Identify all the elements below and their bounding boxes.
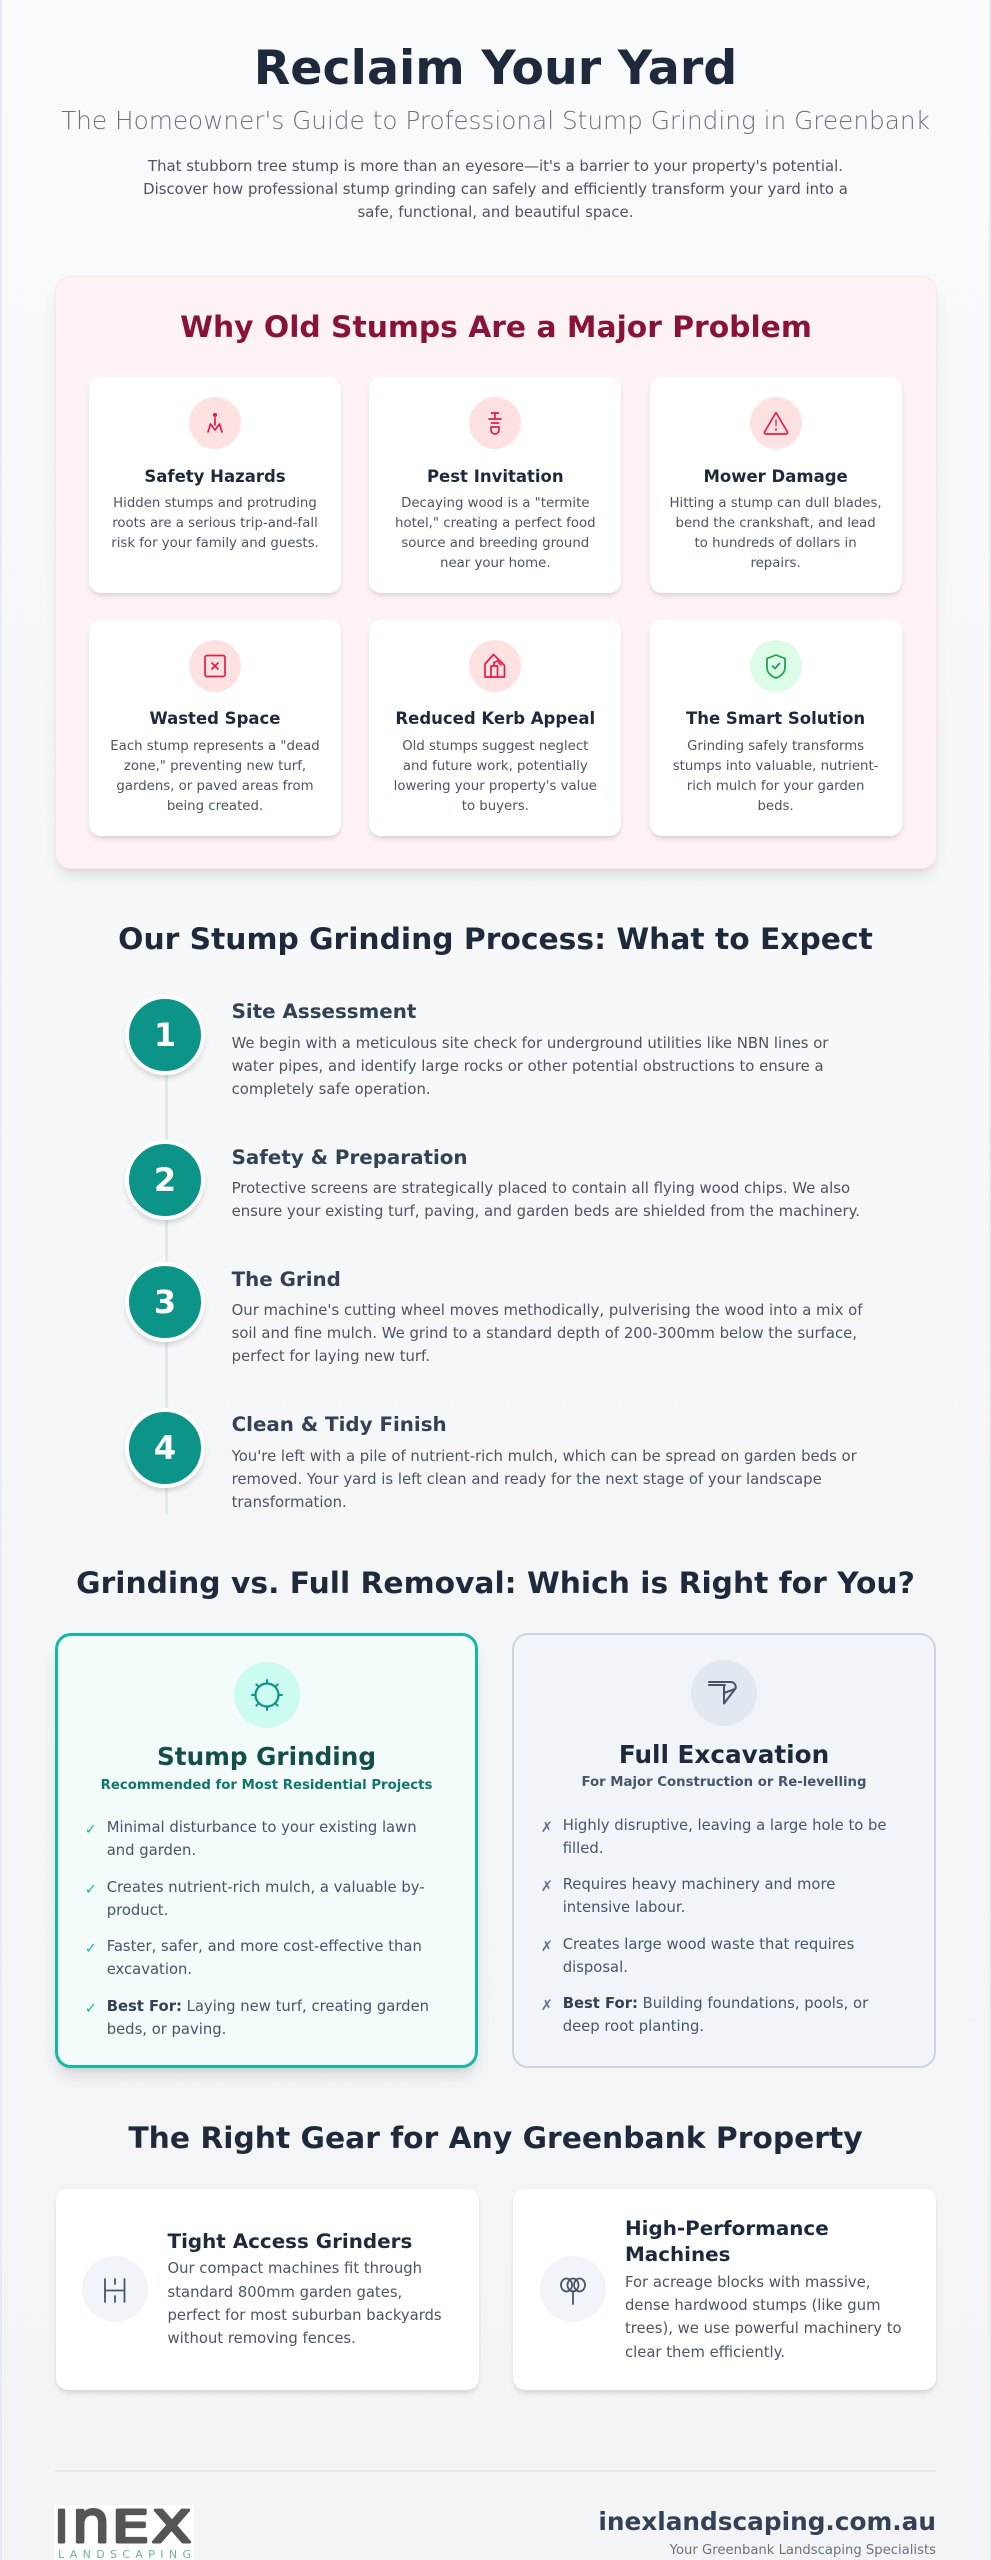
step title: The Grind [232, 1268, 341, 1290]
step text: soil and fine mulch. We grind to a standard depth of 200-300mm below the surface, [232, 1324, 857, 1342]
card: reduced kerb appeal [369, 620, 621, 836]
icon: grinding wheel [234, 1662, 300, 1728]
card title [625, 2216, 829, 2266]
icon: crossed box [189, 640, 241, 692]
benefit 2: Creates nutrient-rich mulch, a valuable by- [107, 1878, 425, 1896]
benefit 2: product. [107, 1902, 168, 1918]
card text: dense hardwood stumps (like gum [625, 2297, 880, 2314]
step text: You're left with a pile of nutrient-rich mulch, which can be spread on garden beds or [232, 1447, 857, 1465]
intro paragraph [143, 157, 848, 221]
drawback 1: filled. [563, 1840, 603, 1857]
drawback 1: Highly disruptive, leaving a large hole to be [563, 1817, 887, 1834]
card text [395, 496, 596, 571]
icon: pest [469, 397, 521, 449]
title: Reclaim Your Yard [254, 41, 737, 96]
step number: 1 [154, 1016, 176, 1054]
intro paragraph: Discover how professional stump grinding can safely and efficiently transform your yard into a [143, 180, 848, 198]
card text: For acreage blocks with massive, [625, 2274, 870, 2291]
option subtitle: Recommended for Most Residential Projects [101, 1778, 432, 1792]
step text [232, 1034, 828, 1098]
card: safety hazards [89, 377, 341, 593]
drawback 1 [541, 1817, 887, 1857]
step text: ensure your existing turf, paving, and garden beds are shielded from the machinery. [232, 1202, 860, 1220]
card: tight access grinders [56, 2188, 478, 2390]
step title: Clean & Tidy Finish [232, 1413, 447, 1436]
card text: to buyers. [462, 799, 529, 814]
step 1 [124, 996, 828, 1098]
benefit 4: Best For: Laying new turf, creating garden [107, 1998, 429, 2014]
step number [125, 1140, 205, 1220]
card text: without removing fences. [168, 2330, 356, 2347]
card text: Our compact machines fit through [168, 2260, 422, 2277]
card text [168, 2260, 442, 2347]
website: inexlandscaping.com.au [598, 2507, 936, 2536]
card: the smart solution [650, 620, 902, 836]
icon: narrow gate [82, 2256, 148, 2322]
card text: being created. [167, 799, 263, 814]
benefit 2 [85, 1878, 425, 1918]
step 2 [124, 1140, 860, 1225]
card: pest invitation [369, 377, 621, 593]
card text: source and breeding ground [401, 536, 589, 551]
card text: gardens, or paved areas from [116, 779, 314, 794]
subtitle: The Homeowner's Guide to Professional Stump Grinding in Greenbank [61, 106, 930, 134]
step text: Our machine's cutting wheel moves methodically, pulverising the wood into a mix of [232, 1301, 863, 1319]
card text: clear them efficiently. [625, 2344, 785, 2361]
card text: Hitting a stump can dull blades, [670, 496, 882, 511]
card text: trees), we use powerful machinery to [625, 2320, 902, 2337]
card title: Tight Access Grinders [168, 2230, 412, 2252]
step text [232, 1179, 860, 1220]
panel: why old stumps are a problem [55, 276, 937, 869]
panel: stump grinding: ✓ [85, 1822, 97, 1838]
drawback 2: intensive labour. [563, 1899, 685, 1916]
card text: risk for your family and guests. [111, 536, 319, 551]
card text: rich mulch for your garden [687, 779, 864, 794]
benefit 3 [85, 1938, 422, 1978]
step number: 4 [154, 1429, 176, 1467]
panel: full excavation: ✗ [541, 1938, 553, 1954]
step 3 [124, 1262, 863, 1365]
intro paragraph: safe, functional, and beautiful space. [358, 203, 633, 221]
icon: cutting wheel [540, 2256, 606, 2322]
step number: 2 [154, 1161, 176, 1199]
card text [110, 739, 320, 814]
step text: removed. Your yard is left clean and ready for the next stage of your landscape [232, 1470, 822, 1488]
panel: full excavation [512, 1633, 936, 2068]
card: wasted space [89, 620, 341, 836]
card text: perfect for most suburban backyards [168, 2307, 442, 2324]
panel: stump grinding [55, 1633, 478, 2068]
step text: completely safe operation. [232, 1080, 431, 1098]
heading: equipment: The Right Gear for Any Greenbank Property [128, 2120, 863, 2156]
icon: house [469, 640, 521, 692]
card title: High-Performance [625, 2216, 829, 2240]
tagline: Your Greenbank Landscaping Specialists [670, 2543, 936, 2558]
heading: comparison: Grinding vs. Full Removal: Which is Right for You? [76, 1566, 915, 1601]
icon: warning triangle [750, 397, 802, 449]
card text: hotel," creating a perfect food [395, 516, 596, 531]
card text: Old stumps suggest neglect [402, 739, 588, 754]
card text: Hidden stumps and protruding [113, 496, 317, 511]
panel: stump grinding: ✓ [85, 1882, 97, 1898]
process timeline [124, 996, 863, 1514]
card text: lowering your property's value [394, 779, 597, 794]
step text [232, 1301, 863, 1365]
benefit 3: Faster, safer, and more cost-effective than [107, 1938, 422, 1955]
step text: water pipes, and identify large rocks or other potential obstructions to ensure a [232, 1057, 824, 1075]
drawback 3 [541, 1936, 854, 1976]
heading: process: Our Stump Grinding Process: What to Expect [118, 922, 873, 957]
step number: 3 [154, 1283, 176, 1321]
card text [673, 739, 878, 814]
card text [670, 496, 882, 571]
drawback 3: disposal. [563, 1958, 628, 1976]
panel: full excavation: ✗ [541, 1820, 553, 1836]
step number [125, 1262, 205, 1342]
drawback 3: Creates large wood waste that requires [563, 1936, 854, 1952]
icon: trip hazard [189, 397, 241, 449]
card title: Safety Hazards [144, 466, 286, 486]
drawback 4: Best For: Building foundations, pools, or [563, 1995, 868, 2012]
step text [232, 1447, 857, 1511]
drawback 2: Requires heavy machinery and more [563, 1876, 835, 1893]
panel: stump grinding: ✓ [85, 1941, 97, 1957]
step number [125, 994, 205, 1074]
card text: Grinding safely transforms [687, 739, 864, 754]
card title: The Smart Solution [686, 709, 865, 728]
step text: Protective screens are strategically placed to contain all flying wood chips. We also [232, 1179, 850, 1197]
icon: shield check [750, 640, 802, 692]
card text: beds. [757, 799, 794, 814]
option title: Full Excavation [619, 1740, 829, 1768]
step title: Site Assessment [232, 1000, 416, 1023]
card text: Decaying wood is a "termite [401, 496, 589, 511]
card text: to hundreds of dollars in [695, 536, 857, 551]
benefit 3: excavation. [107, 1961, 192, 1978]
panel heading: Why Old Stumps Are a Major Problem [180, 310, 812, 344]
step number [125, 1408, 205, 1488]
card text [111, 496, 319, 551]
card text: near your home. [440, 556, 551, 571]
card text: standard 800mm garden gates, [168, 2284, 402, 2301]
card text: and future work, potentially [403, 759, 588, 774]
panel: full excavation: ✗ [541, 1879, 553, 1895]
card text: stumps into valuable, nutrient- [673, 759, 878, 774]
card title: Wasted Space [149, 709, 280, 728]
drawback 4: deep root planting. [563, 2018, 704, 2035]
benefit 4: beds, or paving. [107, 2020, 226, 2038]
option subtitle: For Major Construction or Re-levelling [582, 1775, 866, 1790]
step text: We begin with a meticulous site check for underground utilities like NBN lines or [232, 1034, 828, 1052]
drawback 2 [541, 1876, 835, 1916]
benefit 4 [85, 1998, 429, 2038]
card text: Each stump represents a "dead [110, 739, 320, 754]
option title: Stump Grinding [157, 1742, 376, 1771]
card text: roots are a serious trip-and-fall [112, 516, 318, 531]
intro paragraph: That stubborn tree stump is more than an eyesore—it's a barrier to your property's potential. [148, 157, 843, 175]
step text: transformation. [232, 1493, 347, 1511]
step text: perfect for laying new turf. [232, 1347, 430, 1365]
panel: full excavation: ✗ [541, 1998, 553, 2014]
card: mower damage [650, 377, 902, 593]
step title: Safety & Preparation [232, 1146, 468, 1168]
card text: zone," preventing new turf, [124, 759, 306, 774]
benefit 1 [85, 1819, 417, 1859]
benefit 1: and garden. [107, 1842, 196, 1859]
panel: stump grinding: ✓ [85, 2000, 97, 2016]
drawback 4 [541, 1995, 868, 2035]
benefit 1: Minimal disturbance to your existing lawn [107, 1819, 417, 1836]
card title: Machines [625, 2242, 730, 2266]
card text: bend the crankshaft, and lead [676, 516, 876, 531]
icon: excavator bucket [691, 1660, 757, 1726]
card text: repairs. [750, 556, 801, 571]
card: high-performance machines [513, 2188, 936, 2390]
card title: Pest Invitation [427, 466, 564, 486]
card title: Mower Damage [703, 466, 848, 486]
logo [54, 2505, 194, 2560]
step 4 [124, 1408, 857, 1511]
card text [394, 739, 597, 814]
card title: Reduced Kerb Appeal [395, 709, 595, 728]
card text [625, 2274, 902, 2361]
